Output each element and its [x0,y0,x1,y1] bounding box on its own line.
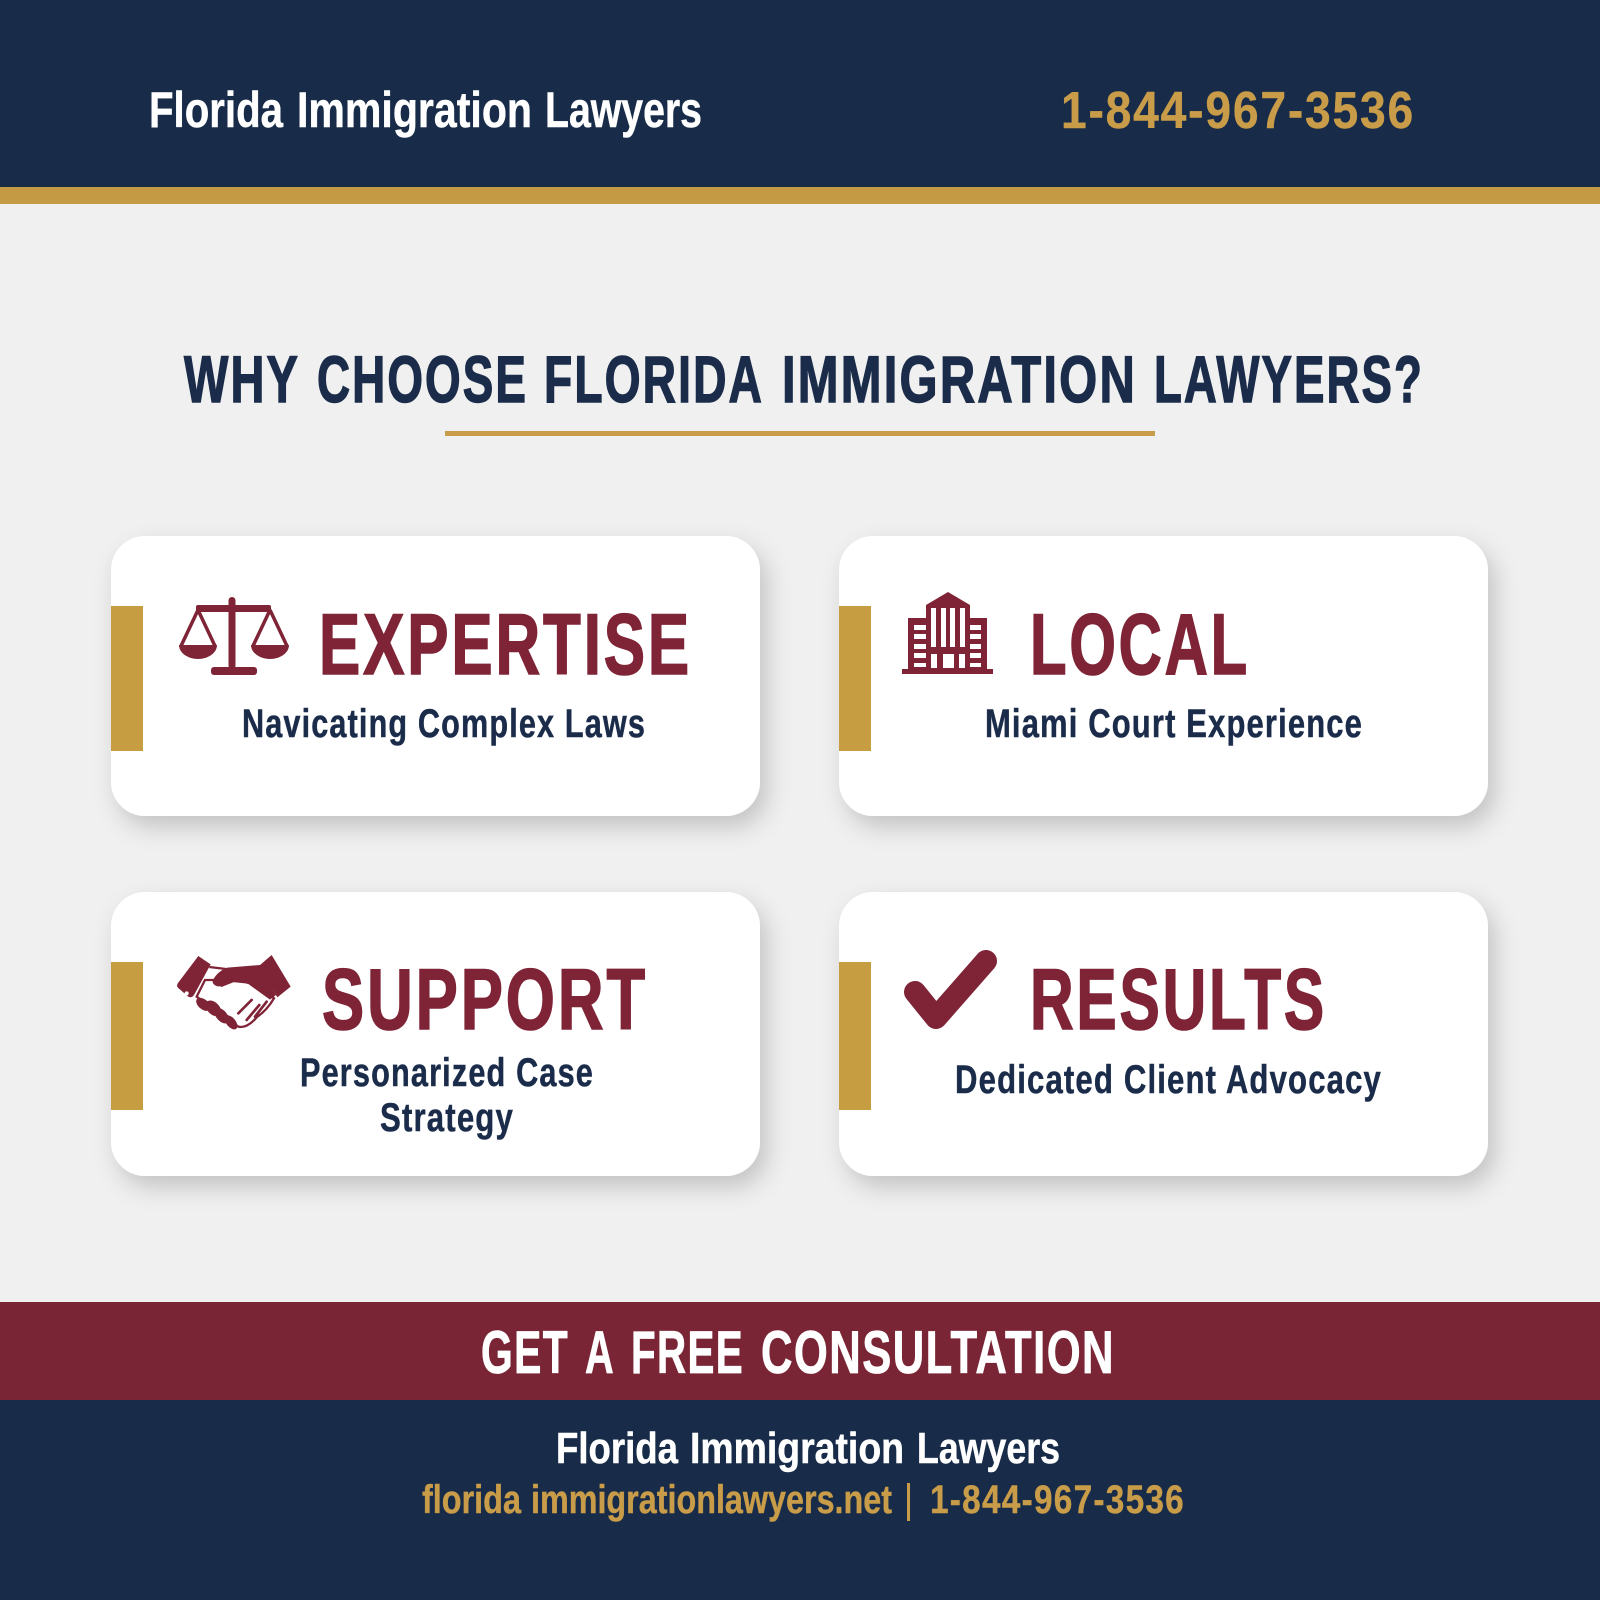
footer separator [907,1483,910,1521]
main title: IMMIGRATION [782,342,1137,416]
icon: scales of justice [179,597,289,675]
heading: local: LOCAL [1030,597,1250,693]
header gold stripe [0,187,1600,204]
icon: check mark [915,961,986,1018]
subtext: results: Dedicated Client Advocacy [955,1058,1382,1102]
subtext: support: Strategy [380,1096,514,1140]
main title: WHY [184,342,300,416]
footer website: immigrationlawyers.net [531,1478,892,1522]
header band [0,0,1600,204]
icon: handshake [177,955,291,1032]
gold tab [839,606,871,751]
subtext: local: Miami Court Experience [985,702,1363,746]
panel: support [111,892,760,1176]
footer band [0,1400,1600,1600]
gold tab [111,962,143,1110]
icon: courthouse building [902,592,993,674]
header firm name: Florida [149,82,284,138]
call to action text [481,1319,1115,1386]
footer firm name [556,1424,1060,1473]
footer firm name: Florida [556,1424,678,1473]
main title [184,342,1424,416]
main title: FLORIDA [544,342,764,416]
title underline [445,431,1155,436]
call to action text: CONSULTATION [761,1319,1115,1386]
heading: support: SUPPORT [322,952,648,1048]
gold tab [111,606,143,751]
header firm name: Lawyers [545,82,702,138]
header firm name [149,82,702,138]
footer website [422,1478,892,1522]
main title: CHOOSE [317,342,528,416]
main title: LAWYERS? [1154,342,1424,416]
header firm name: Immigration [297,82,532,138]
gold tab [839,962,871,1110]
subtext: support [300,1051,594,1140]
heading: results: RESULTS [1030,952,1327,1048]
subtext: support: Personarized Case [300,1051,594,1095]
panel: expertise [111,536,760,816]
call to action text: FREE [631,1319,744,1386]
footer website: florida [422,1478,522,1522]
call to action text: A [585,1319,615,1386]
heading: expertise: EXPERTISE [319,597,692,693]
call to action text: GET [481,1319,569,1386]
panel: local [839,536,1488,816]
footer firm name: Lawyers [917,1424,1060,1473]
footer firm name: Immigration [690,1424,904,1473]
call to action band [0,1302,1600,1400]
header phone number: 1-844-967-3536 [1061,82,1415,140]
panel: results [839,892,1488,1176]
footer phone number: 1-844-967-3536 [930,1478,1185,1522]
subtext: expertise: Navicating Complex Laws [242,702,646,746]
